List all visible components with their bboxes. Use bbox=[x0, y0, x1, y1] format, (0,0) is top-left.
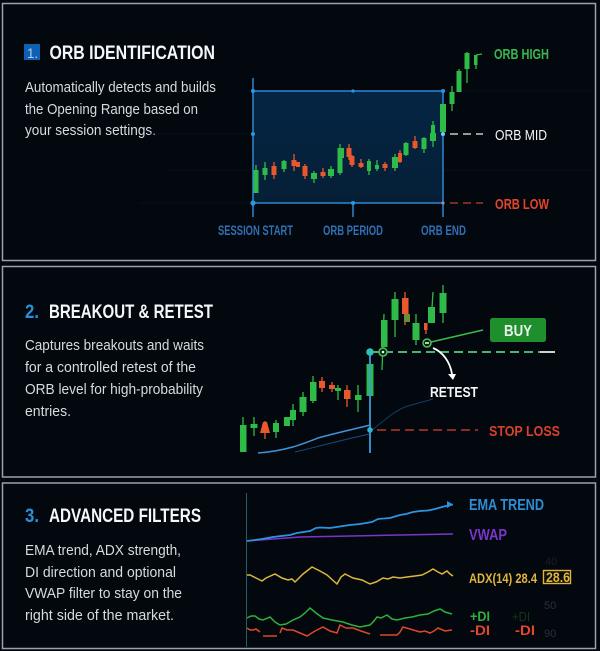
text block: breakout description bbox=[25, 338, 204, 420]
faint scale numbers bbox=[544, 556, 557, 640]
callout: ORB low bbox=[450, 196, 550, 213]
entry marker and connector bbox=[423, 330, 483, 347]
candles: breakout price action bbox=[240, 285, 446, 452]
text block: breakout description: Captures breakouts and waits bbox=[25, 338, 204, 354]
line: EMA trend bbox=[247, 504, 453, 541]
line: plus DI bbox=[247, 608, 452, 627]
label: plus DI: +DI bbox=[470, 608, 490, 624]
label: retest: RETEST bbox=[430, 384, 478, 401]
chart: indicator lines bbox=[246, 493, 453, 647]
text block: ORB description: the Opening Range based on bbox=[25, 102, 198, 118]
button: buy: BUY bbox=[504, 323, 532, 340]
line: ADX bbox=[247, 567, 453, 584]
panel: advanced filters bbox=[2, 483, 596, 648]
text block: breakout description: for a controlled retest of the bbox=[25, 360, 196, 376]
text block: ORB description: your session settings. bbox=[25, 123, 156, 139]
candles: ORB price action bbox=[254, 52, 482, 193]
text block: filters description: right side of the market. bbox=[25, 608, 174, 624]
label: EMA trend: EMA TREND bbox=[469, 497, 544, 514]
label: minus DI: -DI bbox=[470, 622, 490, 638]
label: minus DI: -DI bbox=[515, 622, 535, 638]
panel: ORB identification bbox=[2, 4, 596, 260]
label: ORB high: ORB HIGH bbox=[494, 46, 549, 63]
button: buy bbox=[490, 318, 546, 342]
heading: breakout and retest: 2. bbox=[25, 302, 39, 323]
heading: breakout and retest: BREAKOUT & RETEST bbox=[49, 302, 213, 323]
heading: advanced filters: ADVANCED FILTERS bbox=[49, 506, 201, 527]
label: ADX value: 28.6 bbox=[546, 569, 570, 585]
axis labels: session timeline: ORB END bbox=[421, 223, 466, 238]
text block: ORB description: Automatically detects and builds bbox=[25, 80, 216, 96]
callout: stop loss: STOP LOSS bbox=[489, 423, 560, 440]
callout: ORB mid bbox=[450, 127, 547, 144]
arrow: retest bbox=[433, 348, 456, 380]
label: ADX value: ADX(14) 28.4 bbox=[469, 570, 537, 586]
heading: ORB identification: ORB IDENTIFICATION bbox=[50, 43, 215, 64]
axis labels: session timeline: ORB PERIOD bbox=[323, 223, 383, 238]
text block: breakout description: entries. bbox=[25, 404, 71, 420]
faint scale numbers: 40 bbox=[545, 556, 557, 568]
label: plus DI: +DI bbox=[512, 609, 530, 624]
label: minus DI bbox=[470, 622, 535, 638]
text block: breakout description: ORB level for high-probability bbox=[25, 382, 204, 398]
text block: ORB description bbox=[25, 80, 216, 139]
line: VWAP bbox=[247, 534, 453, 541]
badge: step 1: 1. bbox=[27, 45, 38, 61]
heading: advanced filters: 3. bbox=[25, 506, 39, 527]
text block: filters description: DI direction and optional bbox=[25, 565, 176, 581]
line: minus DI bbox=[247, 625, 452, 636]
axis labels: session timeline: SESSION START bbox=[218, 223, 294, 238]
callout: ORB low: ORB LOW bbox=[495, 196, 550, 213]
label: VWAP: VWAP bbox=[469, 527, 507, 544]
text block: filters description: VWAP filter to stay on the bbox=[25, 586, 182, 602]
label: plus DI bbox=[470, 608, 530, 624]
chart: breakout candles and retest bbox=[240, 285, 560, 453]
chart: opening range box with candles bbox=[140, 52, 590, 217]
faint scale numbers: 90 bbox=[544, 628, 556, 640]
badge: step 1 bbox=[24, 44, 40, 61]
axis labels: session timeline bbox=[218, 223, 466, 238]
breakout level bbox=[370, 352, 555, 453]
text block: filters description bbox=[25, 543, 182, 624]
text block: filters description: EMA trend, ADX strength, bbox=[25, 543, 181, 559]
callout: ORB mid: ORB MID bbox=[495, 127, 547, 144]
faint scale numbers: 50 bbox=[544, 600, 556, 612]
moving average lines bbox=[258, 399, 433, 453]
panel: breakout and retest bbox=[2, 266, 596, 477]
